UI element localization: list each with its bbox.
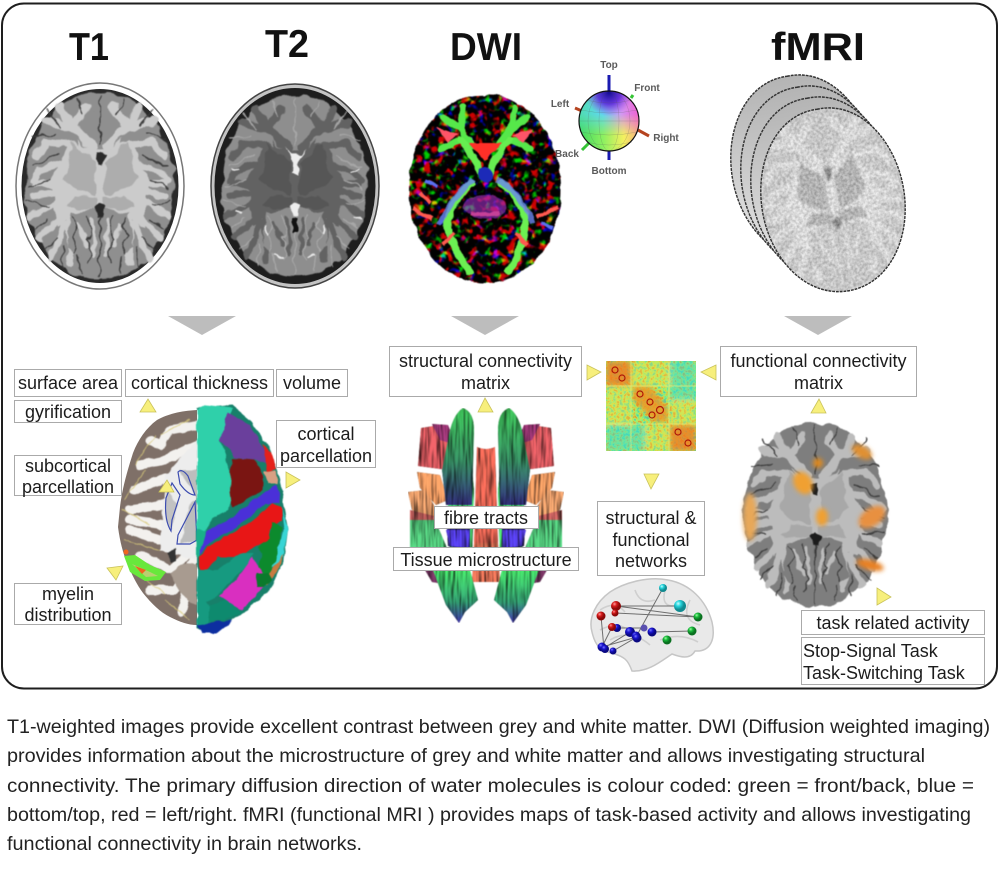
caption text: connectivity. The primary diffusion direction of water molecules is colour coded: green = front/back, blue = (7, 775, 974, 797)
label: volume (276, 370, 348, 396)
arrow: T1/T2 down (168, 316, 236, 335)
icon: diffusion direction colour sphere: Bottom (592, 166, 627, 177)
label: myelin distribution (14, 584, 122, 625)
arrow: fMRI down (784, 316, 852, 335)
label: cortical thickness (126, 370, 274, 396)
label: task names: Stop-Signal Task (803, 641, 939, 661)
icon: diffusion direction colour sphere: Right (653, 133, 679, 144)
arrow: functional to matrix (701, 365, 716, 380)
icon: diffusion direction colour sphere: Front (634, 83, 660, 94)
label: surface area: surface area (18, 373, 119, 393)
label: structural and functional networks: networks (615, 551, 687, 571)
arrow: structural to matrix (587, 365, 601, 380)
brain: white matter fibre tracts (408, 408, 564, 623)
label: subcortical parcellation: subcortical (25, 456, 111, 476)
arrow: to functional connectivity matrix (811, 399, 826, 413)
label: structural and functional networks (598, 502, 704, 576)
brain scan: fMRI slice stack (730, 74, 906, 292)
label: tissue microstructure: Tissue microstructure (400, 550, 572, 570)
tract: left side bundles (408, 408, 478, 623)
icon: diffusion direction colour sphere (551, 60, 679, 177)
brain: task activation map (743, 423, 889, 607)
label: structural connectivity matrix: matrix (461, 373, 510, 393)
brain: anatomy and parcellation (115, 405, 288, 633)
tract: central commissure lower (472, 543, 500, 582)
label: cortical parcellation: cortical (297, 424, 355, 444)
icon: diffusion direction colour sphere: Back (555, 149, 579, 160)
label: task names: Task-Switching Task (803, 663, 966, 683)
label: functional connectivity matrix: matrix (794, 373, 843, 393)
label: functional connectivity matrix: functional connectivity (730, 351, 907, 371)
label: task related activity: task related activity (816, 613, 970, 633)
caption text (7, 716, 990, 855)
brain scan: T2 (211, 84, 379, 288)
heading: fMRI: fMRI (771, 26, 865, 69)
arrow: DWI down (451, 316, 519, 335)
arrow: to cortical parcellation (286, 472, 300, 488)
arrow: matrix to networks (644, 474, 659, 489)
brain scan: T1 (16, 83, 184, 289)
caption text: functional connectivity in brain networks. (7, 833, 362, 855)
icon: diffusion direction colour sphere: Left (551, 99, 570, 110)
icon: diffusion direction colour sphere: Top (600, 60, 618, 71)
brain left half: anatomical slice (118, 410, 197, 625)
heading: T2: T2 (265, 23, 309, 66)
label: myelin distribution: myelin (42, 584, 94, 604)
label: task related activity (802, 610, 984, 634)
label: cortical parcellation: parcellation (280, 446, 372, 466)
brain scan: DWI colour map (409, 93, 561, 285)
heading: T1: T1 (69, 26, 109, 69)
label: subcortical parcellation: parcellation (22, 477, 114, 497)
label: structural connectivity matrix (390, 346, 582, 396)
label: structural connectivity matrix: structural connectivity (399, 351, 572, 371)
label: subcortical parcellation (14, 456, 122, 497)
subcortical outlines (166, 471, 197, 544)
arrow: to structural connectivity matrix (478, 398, 493, 412)
panel: imaging modalities frame (2, 4, 997, 688)
arrow: to task related activity (877, 588, 891, 605)
label: fibre tracts: fibre tracts (444, 508, 528, 528)
label: gyrification: gyrification (25, 402, 111, 422)
label: cortical parcellation (276, 420, 376, 468)
caption text: provides information about the microstructure of grey and white matter and allows investigating structural (7, 745, 925, 767)
tract: central commissure (474, 447, 498, 543)
arrow: to cortical thickness (140, 399, 156, 412)
myelin map highlight (124, 550, 166, 581)
heading: DWI: DWI (450, 26, 522, 69)
label: volume: volume (283, 373, 341, 393)
arrow: to myelin distribution (107, 566, 123, 580)
chart: connectivity matrix (606, 361, 696, 451)
label: myelin distribution: distribution (24, 605, 112, 625)
caption text: bottom/top, red = left/right. fMRI (functional MRI ) provides maps of task-based activity and allows investigating (7, 804, 971, 826)
label: structural and functional networks: structural & (605, 508, 697, 528)
arrow: to subcortical parcellation (159, 480, 174, 492)
caption text: T1-weighted images provide excellent contrast between grey and white matter. DWI (Diffusion weighted imaging) (7, 716, 990, 738)
label: cortical thickness: cortical thickness (131, 373, 268, 393)
icon: brain network (591, 579, 713, 671)
label: functional connectivity matrix (720, 346, 916, 396)
label: task names (802, 638, 984, 684)
label: surface area (14, 370, 122, 396)
label: structural and functional networks: functional (612, 530, 690, 550)
tract: right side bundles (494, 408, 564, 623)
parcels: coloured cortical regions (197, 405, 288, 633)
